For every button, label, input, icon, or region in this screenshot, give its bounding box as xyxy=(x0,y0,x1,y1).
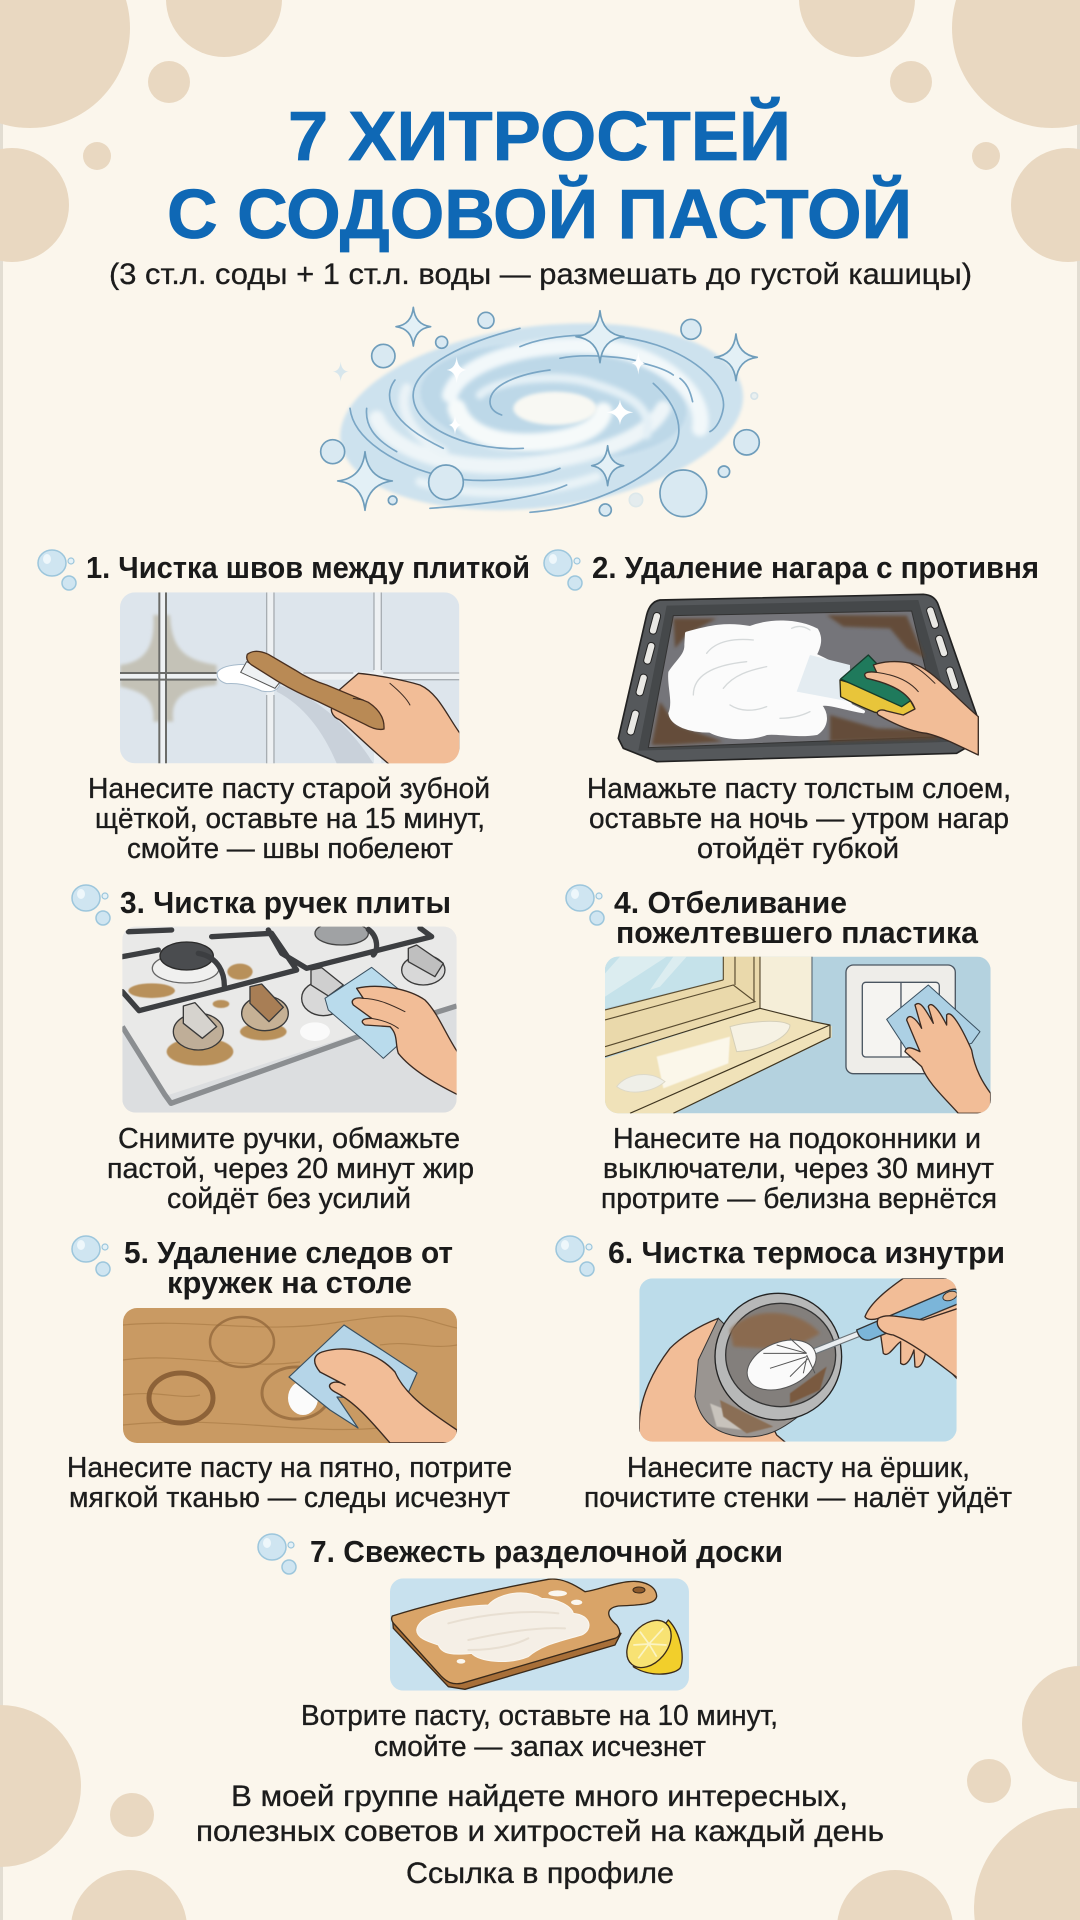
hand xyxy=(315,1349,457,1443)
heading 4: пожелтевшего пластика xyxy=(616,915,979,950)
description 1: щёткой, оставьте на 15 минут, xyxy=(95,803,485,835)
slots xyxy=(626,606,959,736)
footer: call to action: полезных советов и хитростей на каждый день xyxy=(196,1815,884,1848)
description 3 xyxy=(107,1123,474,1215)
brush handle xyxy=(247,651,384,729)
description 3: сойдёт без усилий xyxy=(167,1183,411,1215)
footer: call to action xyxy=(196,1780,884,1890)
description 1: смойте — швы побелеют xyxy=(127,833,453,865)
cloth xyxy=(887,985,980,1060)
heading 2: 2. Удаление нагара с противня xyxy=(592,550,1039,585)
description 7: смойте — запах исчезнет xyxy=(374,1731,706,1763)
title: С СОДОВОЙ ПАСТОЙ xyxy=(167,174,912,253)
panel: step 1 xyxy=(38,550,530,865)
description 5: мягкой тканью — следы исчезнут xyxy=(69,1482,510,1514)
icon: bubbles xyxy=(258,1534,296,1574)
description 5: Нанесите пасту на пятно, потрите xyxy=(67,1452,512,1484)
brush handle xyxy=(857,1289,959,1340)
burners xyxy=(152,958,219,984)
illustration: stove knobs xyxy=(122,922,458,1113)
heading 4: 4. Отбеливание xyxy=(614,885,847,920)
bristles xyxy=(241,662,282,688)
description 5 xyxy=(67,1452,512,1514)
icon: bubbles xyxy=(72,885,110,925)
paste xyxy=(417,1593,589,1661)
paste xyxy=(217,664,281,692)
description 2: отойдёт губкой xyxy=(697,833,899,865)
bubbles xyxy=(321,312,759,517)
sponge xyxy=(840,680,915,716)
description 1 xyxy=(88,773,490,865)
heading 6: 6. Чистка термоса изнутри xyxy=(608,1235,1005,1270)
brush xyxy=(746,1340,817,1390)
description 1: Нанесите пасту старой зубной xyxy=(88,773,490,805)
swirl outlines xyxy=(350,328,724,512)
knobs xyxy=(173,945,445,1050)
hand xyxy=(865,662,978,755)
heading 5: 5. Удаление следов от xyxy=(124,1235,453,1270)
hand xyxy=(331,673,460,765)
description 3: Снимите ручки, обмажьте xyxy=(118,1123,460,1155)
title xyxy=(167,96,912,253)
grates xyxy=(122,928,432,1011)
description 6: почистите стенки — налёт уйдёт xyxy=(584,1482,1012,1514)
description 4: Нанесите на подоконники и xyxy=(613,1123,981,1155)
heading 7: 7. Свежесть разделочной доски xyxy=(310,1534,783,1569)
illustration: tile grout and toothbrush xyxy=(120,592,460,765)
icon: bubbles xyxy=(544,550,582,590)
heading 5: кружек на столе xyxy=(167,1265,412,1300)
heading 4 xyxy=(614,885,979,950)
description 4: выключатели, через 30 минут xyxy=(603,1153,994,1185)
lemon xyxy=(633,1620,682,1674)
panel: step 7 xyxy=(258,1534,783,1763)
description 3: пастой, через 20 минут жир xyxy=(107,1153,474,1185)
cloth xyxy=(289,1325,417,1428)
stains xyxy=(128,964,287,1066)
footer: call to action: В моей группе найдете много интересных, xyxy=(231,1780,848,1813)
description 6 xyxy=(584,1452,1012,1514)
sparkles xyxy=(333,307,757,510)
description 2: Намажьте пасту толстым слоем, xyxy=(587,773,1011,805)
board xyxy=(392,1617,621,1689)
heading 3: 3. Чистка ручек плиты xyxy=(120,885,451,920)
hand xyxy=(905,1004,991,1113)
thumb xyxy=(877,1308,958,1378)
brush stem xyxy=(814,1331,860,1354)
panel: step 4 xyxy=(566,885,997,1215)
paste smears xyxy=(657,1037,730,1088)
hand right xyxy=(865,1278,958,1380)
icon: bubbles xyxy=(556,1236,594,1276)
icon: bubbles xyxy=(72,1236,110,1276)
illustration: thermos and bottle brush xyxy=(639,1278,959,1443)
illustration: window sill and switch xyxy=(605,957,991,1113)
description 2: оставьте на ночь — утром нагар xyxy=(589,803,1009,835)
description 6: Нанесите пасту на ёршик, xyxy=(627,1452,970,1484)
title: 7 ХИТРОСТЕЙ xyxy=(288,96,791,175)
description 7 xyxy=(301,1700,778,1763)
description 4 xyxy=(601,1123,997,1215)
swirl centre xyxy=(513,392,597,425)
illustration: soda paste swirl xyxy=(321,302,759,531)
paste xyxy=(670,622,863,738)
cloth xyxy=(325,967,402,1058)
switch xyxy=(846,965,955,1074)
panel: step 3 xyxy=(72,885,474,1215)
panel: step 2 xyxy=(544,550,1039,865)
heading 5 xyxy=(124,1235,453,1300)
illustration: wooden table with mug rings xyxy=(123,1308,457,1443)
illustration: cutting board and lemon xyxy=(390,1578,689,1691)
icon: bubbles xyxy=(38,550,76,590)
paste xyxy=(288,1381,318,1415)
description 7: Вотрите пасту, оставьте на 10 минут, xyxy=(301,1700,778,1732)
subtitle: recipe: (3 ст.л. соды + 1 ст.л. воды — размешать до густой кашицы) xyxy=(109,258,972,291)
heading 1: 1. Чистка швов между плиткой xyxy=(86,550,530,585)
panel: step 5 xyxy=(67,1235,512,1514)
description 4: протрите — белизна вернётся xyxy=(601,1183,997,1215)
description 2 xyxy=(587,773,1011,865)
hand xyxy=(352,986,458,1095)
hand left xyxy=(639,1318,787,1443)
burnt patches xyxy=(652,615,938,745)
thermos body xyxy=(695,1318,810,1437)
panel: step 6 xyxy=(556,1235,1012,1514)
icon: bubbles xyxy=(566,885,604,925)
footer: call to action: Ссылка в профиле xyxy=(406,1857,674,1890)
illustration: burnt baking tray xyxy=(618,594,978,762)
